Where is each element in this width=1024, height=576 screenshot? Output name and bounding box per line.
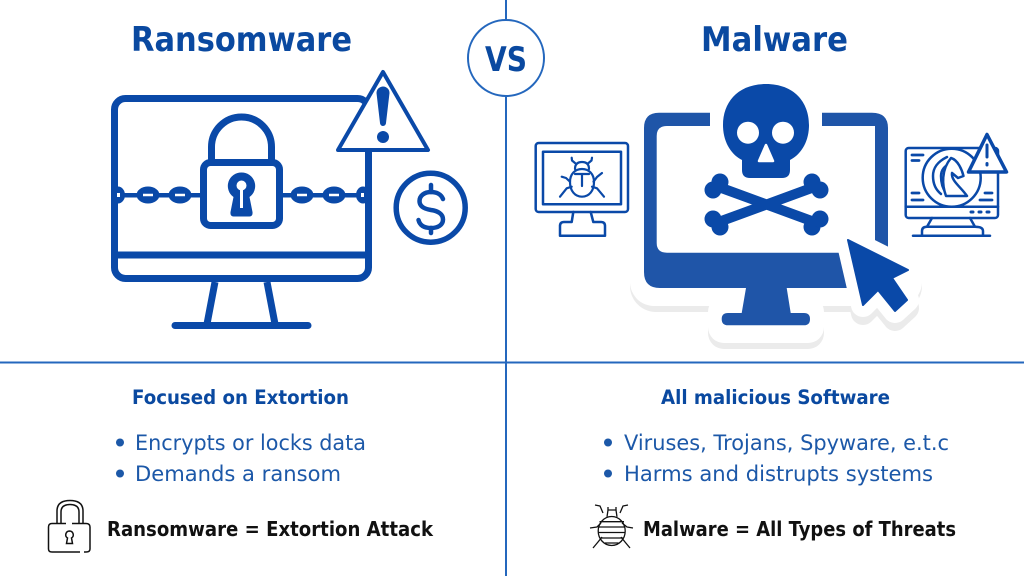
heading: All malicious Software — [661, 386, 890, 409]
bullet list: Encrypts or locks data — [135, 431, 366, 456]
title: Ransomware: Ransomware — [131, 20, 352, 60]
icon: bed bug outline — [590, 505, 633, 548]
summary: Ransomware = Extortion Attack — [107, 517, 434, 541]
warning triangle — [968, 134, 1006, 172]
panel: ransomware details — [48, 386, 434, 552]
monitor body — [644, 113, 888, 325]
icon: padlock outline — [48, 500, 90, 552]
chain — [111, 186, 370, 204]
bullet list: Demands a ransom — [135, 462, 341, 487]
skull — [723, 84, 809, 178]
bullet list: Harms and distrupts systems — [624, 462, 933, 487]
icon: locked computer with warning and dollar — [111, 72, 465, 326]
icon: malware computer — [644, 84, 908, 325]
bullet list: Viruses, Trojans, Spyware, e.t.c — [624, 431, 949, 456]
crossbones — [704, 174, 828, 236]
vs badge — [468, 20, 544, 96]
icon: sticker shadow behind malware computer — [630, 230, 922, 349]
title: Malware: Malware — [701, 20, 848, 60]
monitor frame — [114, 98, 368, 326]
cursor arrow — [848, 240, 908, 311]
bullet list — [116, 431, 366, 487]
icon: bug on monitor — [536, 143, 628, 236]
heading: Focused on Extortion — [132, 386, 349, 409]
bug — [560, 158, 604, 197]
panel: malware details — [590, 386, 956, 548]
warning triangle — [338, 72, 428, 150]
vs badge: VS — [485, 40, 527, 80]
horse medallion — [923, 149, 981, 207]
bullet list — [604, 431, 949, 487]
summary: Malware = All Types of Threats — [643, 517, 956, 541]
padlock — [204, 117, 280, 226]
icon: trojan horse on monitor with warning — [906, 134, 1006, 236]
dollar coin — [396, 173, 465, 242]
